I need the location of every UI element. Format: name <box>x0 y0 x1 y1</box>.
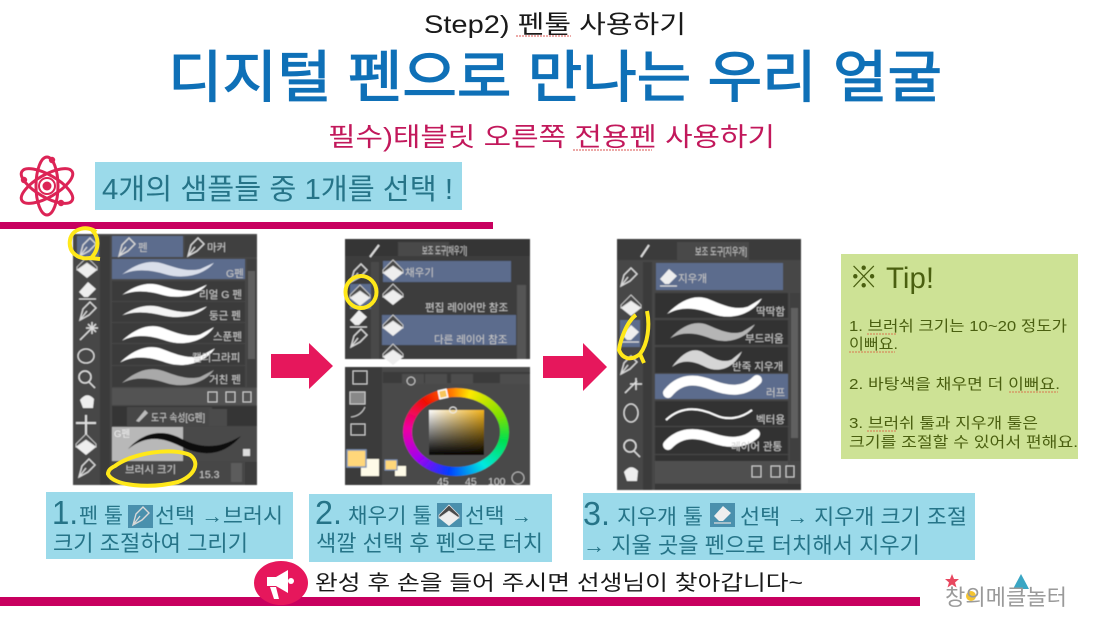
step 2 box: 2. <box>315 494 342 531</box>
highlight: eraser tool circle <box>619 311 648 363</box>
highlight: brush size circle <box>108 451 195 486</box>
panel: color wheel: 100 <box>488 476 506 488</box>
panel: tip: ※ Tip! <box>849 262 934 295</box>
panel: pen tool screenshot: 15.3 <box>199 469 220 481</box>
arrow 2 <box>543 343 607 391</box>
step 2 box <box>309 494 552 562</box>
brush list: 리얼 G 펜 <box>199 289 242 301</box>
logo <box>945 574 1067 610</box>
step 1 box: 1. <box>52 494 78 531</box>
brush preview <box>112 427 257 461</box>
panel: tip: 1. 브러쉬 크기는 10~20 정도가 <box>849 318 1067 335</box>
step 3 box: 3. <box>583 495 610 532</box>
highlight: fill tool circle <box>346 276 376 308</box>
icon: atom <box>16 157 78 215</box>
highlight: pen tool circle <box>70 228 100 259</box>
panel: eraser tool screenshot: 지우개 <box>678 273 707 285</box>
panel: fill tool screenshot: 편집 레이어만 참조 <box>425 301 508 314</box>
pen and marker tabs: 마커 <box>207 242 226 254</box>
panel: color wheel <box>345 367 530 488</box>
brush list <box>112 259 257 387</box>
brush list: 거친 펜 <box>209 374 241 386</box>
panel: eraser tool screenshot: 딱딱함 <box>756 306 785 318</box>
main title: 디지털 펜으로 만나는 우리 얼굴 <box>168 46 942 109</box>
brush list: G펜 <box>226 268 244 280</box>
panel: pen tool screenshot: 브러시 크기 <box>125 464 176 476</box>
subtitle: 필수)태블릿 오른쪽 전용펜 사용하기 <box>328 122 775 152</box>
color square <box>429 410 484 455</box>
panel: eraser tool screenshot: 러프 <box>766 387 786 399</box>
pen and marker tabs <box>112 236 257 257</box>
step 1 box: 크기 조절하여 그리기 <box>53 531 248 556</box>
panel: tip: 이뻐요. <box>849 336 898 353</box>
pen and marker tabs: 펜 <box>138 242 148 254</box>
panel: tip <box>841 254 1078 459</box>
panel: color wheel: 45 <box>437 476 449 488</box>
step 2 box: 채우기 툴 <box>348 505 432 528</box>
callout: choose one sample: 4개의 샘플들 중 1개를 선택 ! <box>102 174 453 206</box>
step 3 box: 지우개 툴 <box>617 506 703 529</box>
color wheel ring <box>403 388 509 476</box>
panel: pen tool screenshot <box>70 228 257 486</box>
arrow 1 <box>271 343 333 389</box>
panel: tip: 2. 바탕색을 채우면 더 이뻐요. <box>849 376 1060 393</box>
step 1 box <box>46 492 293 559</box>
panel: eraser tool screenshot: 벡터용 <box>756 414 785 426</box>
step 1 box: 펜 툴 <box>79 505 123 528</box>
panel: eraser tool screenshot: 반죽 지우개 <box>732 361 783 373</box>
brush list: 스푼펜 <box>213 331 242 343</box>
tool property tab <box>112 406 257 426</box>
panel: tip: 크기를 조절할 수 있어서 편해요. <box>849 434 1078 451</box>
panel: eraser tool screenshot: 보조 도구[지우개] <box>695 246 747 258</box>
brush preview: G펜 <box>114 429 130 440</box>
panel: fill tool screenshot: 보조 도구[채우기] <box>422 245 467 257</box>
step 3 box: → 지울 곳을 펜으로 터치해서 지우기 <box>583 533 920 558</box>
step 3 box <box>583 493 975 560</box>
panel: fill tool screenshot <box>345 239 530 365</box>
icon: pen tool <box>128 505 153 528</box>
icon: eraser tool <box>710 503 735 527</box>
step 2 box: 선택 → <box>465 505 532 528</box>
panel: eraser tool screenshot: 부드러움 <box>745 333 784 345</box>
panel: color wheel: 45 <box>465 476 477 488</box>
top magenta bar <box>0 222 493 229</box>
panel: eraser tool screenshot: 레이어 관통 <box>731 441 783 453</box>
tool property tab: 도구 속성[G펜] <box>151 412 205 424</box>
bottom magenta bar <box>0 597 920 606</box>
panel: eraser tool screenshot <box>617 239 801 490</box>
closing message: 완성 후 손을 들어 주시면 선생님이 찾아갑니다~ <box>315 572 803 595</box>
step 1 box: 선택 →브러시 <box>155 505 283 528</box>
icon: megaphone <box>254 561 308 605</box>
panel: fill tool screenshot: 채우기 <box>405 267 434 279</box>
brush list: 둥근 펜 <box>209 310 241 322</box>
panel: fill tool screenshot: 다른 레이어 참조 <box>434 334 508 346</box>
logo: 창의메클놀터 <box>945 585 1067 610</box>
icon: fill tool <box>437 503 462 527</box>
step heading: Step2) 펜툴 사용하기 <box>424 11 686 39</box>
panel: tip: 3. 브러쉬 툴과 지우개 툴은 <box>849 415 1038 432</box>
callout: choose one sample <box>95 162 462 210</box>
step 3 box: 선택 → 지우개 크기 조절 <box>740 506 967 529</box>
step 2 box: 색깔 선택 후 펜으로 터치 <box>316 531 543 556</box>
brush list: 캘리그라피 <box>192 352 240 364</box>
